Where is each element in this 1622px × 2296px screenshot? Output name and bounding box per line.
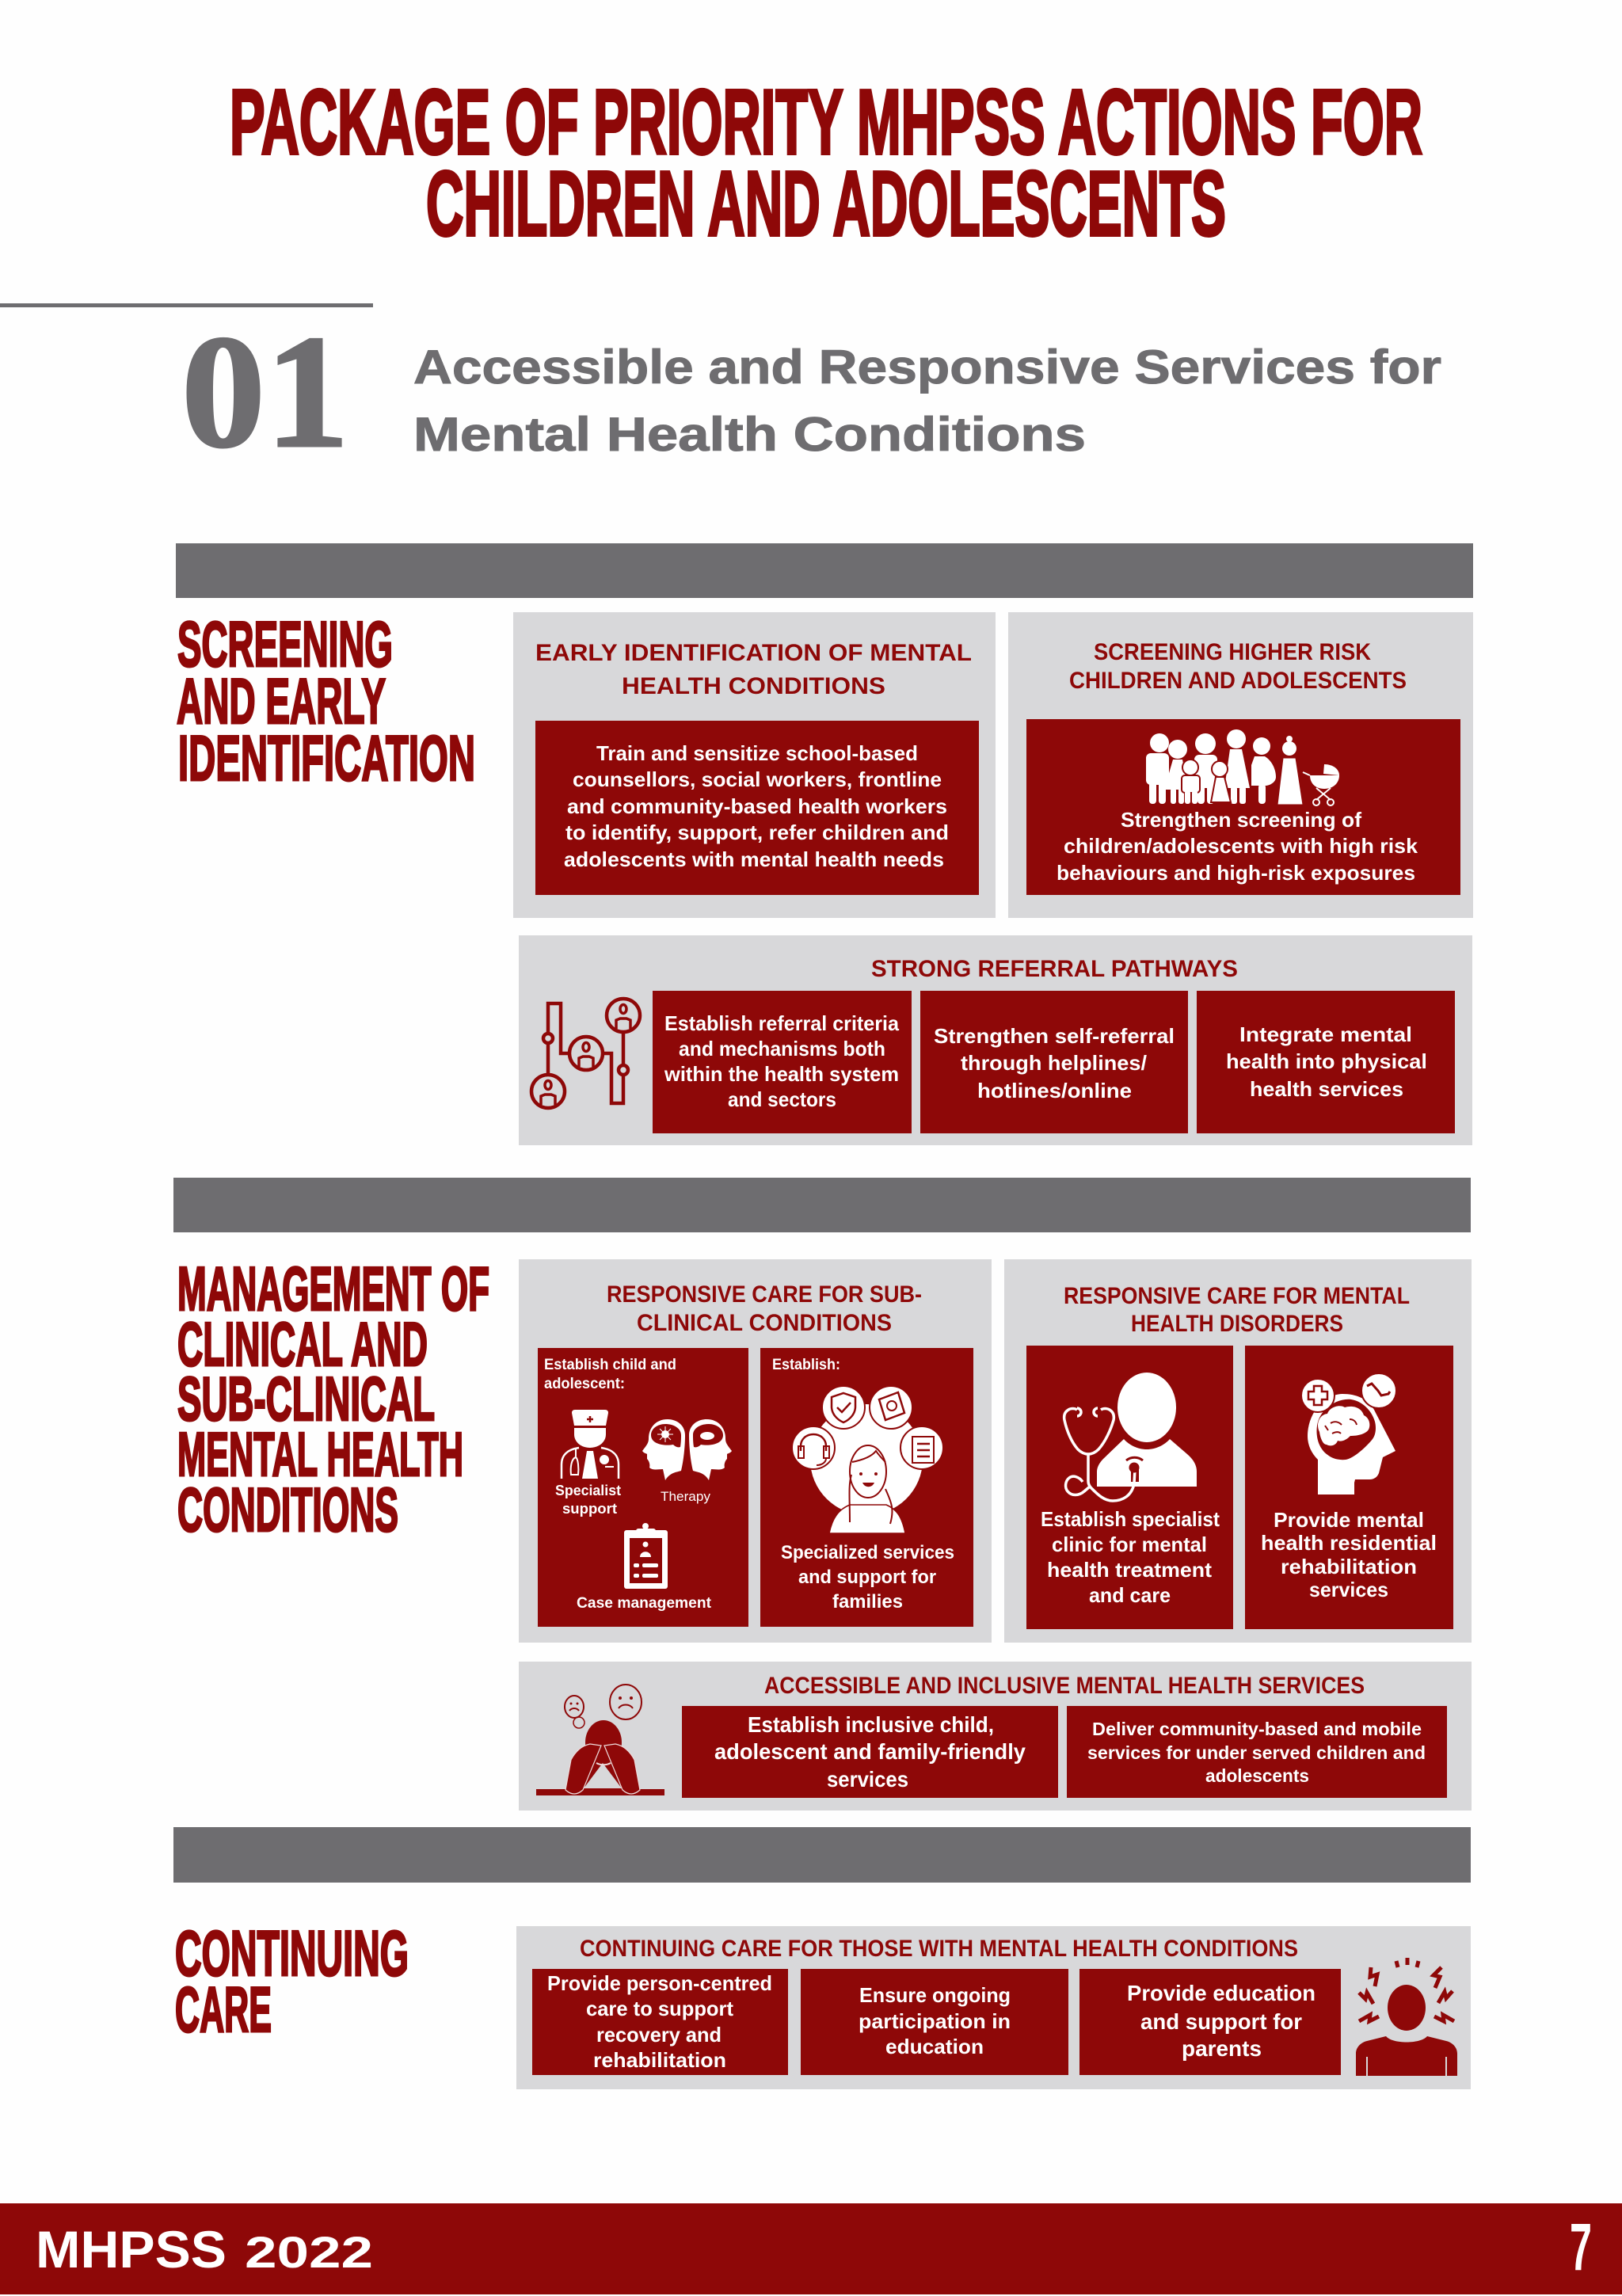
panel heading: sub-clinical [607,1281,922,1336]
heading: screening and early identification: SCREENING [177,609,393,680]
text box: person-centred care: recovery and [596,2023,722,2047]
text box: train and sensitize: counsellors, social workers, frontline [573,767,942,791]
panel heading: early identification: EARLY IDENTIFICATION OF MENTAL [535,640,972,666]
box: specialist clinic: Establish specialist [1041,1507,1220,1531]
text box: support for parents: parents [1182,2036,1262,2061]
text box: community-based services [1067,1706,1447,1798]
heading: management of clinical and sub-clinical: SUB-CLINICAL [177,1364,435,1434]
text box: train and sensitize: adolescents with mental health needs [564,847,944,871]
box: child and adolescent: adolescent: [544,1376,625,1392]
panel heading: screening higher risk [1069,639,1407,694]
text box: referral criteria: and mechanisms both [679,1037,885,1060]
text box: inclusive friendly services: services [827,1767,908,1791]
text box: self-referral: hotlines/online [977,1079,1132,1102]
panel heading: referral: STRONG REFERRAL PATHWAYS [871,956,1238,982]
box: child and adolescent: Establish child and [544,1357,676,1373]
section subtitle [413,341,1441,461]
text box: self-referral: Strengthen self-referral [934,1024,1175,1048]
text box: person-centred care: Provide person-centred [547,1971,772,1995]
text box: strengthen screening: Strengthen screening of [1121,808,1361,832]
title [230,70,1422,255]
panel heading: disorders: HEALTH DISORDERS [1131,1311,1343,1337]
panel heading: sub-clinical: RESPONSIVE CARE FOR SUB- [607,1281,922,1308]
box: specialized services for families: families [832,1591,903,1613]
text box: strengthen screening: children/adolescents with high risk [1064,834,1418,858]
box: residential rehabilitation: Provide mental [1274,1508,1424,1532]
panel heading: early identification [535,640,972,699]
text box: train and sensitize: Train and sensitize school-based [596,741,918,765]
panel heading: sub-clinical: CLINICAL CONDITIONS [637,1310,892,1336]
icon: family group [1146,729,1339,805]
text box: person-centred care: rehabilitation [593,2048,726,2072]
box: specialist clinic: clinic for mental [1052,1533,1207,1556]
icon: head with brain [1301,1373,1396,1494]
panel heading: accessible: ACCESSIBLE AND INCLUSIVE MENTAL HEALTH SERVICES [764,1673,1365,1699]
text box: community-based services: services for under served children and [1087,1742,1426,1763]
panel heading: screening higher risk: SCREENING HIGHER RISK [1094,639,1371,665]
text box: strengthen screening: behaviours and high-risk exposures [1057,861,1415,885]
text box: integrate mental health [1197,991,1455,1133]
section number: 01 [181,303,349,482]
box: specialized services for families: Specialized services [781,1542,954,1563]
text box: community-based services: adolescents [1205,1765,1309,1786]
panel: accessible and inclusive services [519,1662,1472,1811]
box: specialist clinic: and care [1089,1583,1171,1607]
text box: integrate mental health: health services [1250,1077,1403,1101]
box: specialist clinic [1026,1346,1233,1629]
text box: train and sensitize [535,721,979,895]
section subtitle: Accessible and Responsive Services for [413,341,1441,394]
text box: support for parents: Provide education [1127,1981,1315,2005]
heading: screening and early identification: IDENTIFICATION [178,723,475,794]
box: specialized services for families: Establish: [772,1357,840,1373]
footer label: 2022 [245,2227,373,2277]
box: specialized services for families [760,1348,973,1627]
heading: continuing care: CONTINUING [175,1918,409,1989]
text box: support for parents [1079,1969,1341,2075]
text box: self-referral [920,991,1188,1133]
box: child and adolescent: support [562,1501,617,1517]
icon: clipboard [624,1523,668,1589]
heading: screening and early identification [177,609,475,794]
text box: train and sensitize: to identify, support, refer children and [565,821,949,844]
heading: management of clinical and sub-clinical: MANAGEMENT OF [177,1254,489,1323]
text box: inclusive friendly services: Establish inclusive child, [748,1712,994,1737]
icon: stressed person [1356,1958,1457,2076]
panel: strong referral pathways [519,935,1472,1145]
heading: continuing care: CARE [175,1974,272,2046]
box: child and adolescent: Specialist [555,1483,621,1498]
text box: ongoing education: participation in [859,2009,1011,2033]
panel heading: disorders: RESPONSIVE CARE FOR MENTAL [1064,1283,1410,1309]
text box: self-referral: through helplines/ [961,1051,1147,1075]
panel: continuing care [516,1926,1471,2089]
icon: doctor [562,1410,619,1479]
box: specialist clinic: health treatment [1047,1558,1212,1582]
text box: referral criteria: Establish referral criteria [664,1011,900,1035]
text box: ongoing education [801,1969,1068,2075]
text box: person-centred care [532,1969,788,2075]
panel heading: disorders [1064,1283,1410,1337]
heading: management of clinical and sub-clinical [177,1254,489,1544]
panel: early identification [513,612,996,918]
icon: sad person [536,1685,664,1795]
box: residential rehabilitation: services [1309,1578,1388,1601]
icon: referral network [531,999,640,1108]
text box: person-centred care: care to support [586,1997,733,2020]
box: child and adolescent: Case management [577,1595,712,1612]
text box: train and sensitize: and community-based health workers [567,794,947,818]
panel: responsive care sub-clinical [519,1259,992,1643]
section subtitle: Mental Health Conditions [413,408,1086,461]
box: specialized services for families: and support for [798,1567,936,1588]
heading: screening and early identification: AND EARLY [177,666,386,737]
text box: referral criteria: and sectors [728,1087,836,1111]
text box: strengthen screening [1026,719,1460,895]
icon: two heads therapy [642,1419,732,1480]
footer label [36,2220,373,2279]
text box: ongoing education: education [885,2035,984,2058]
icon: patient with stethoscope [1064,1373,1197,1501]
panel heading: screening higher risk: CHILDREN AND ADOLESCENTS [1069,668,1407,694]
text box: community-based services: Deliver community-based and mobile [1092,1719,1422,1739]
box: residential rehabilitation [1245,1346,1453,1629]
heading: continuing care [175,1918,409,2046]
panel: screening higher risk [1008,612,1473,918]
panel heading: early identification: HEALTH CONDITIONS [622,673,885,699]
text box: ongoing education: Ensure ongoing [859,1983,1011,2007]
text box: referral criteria: within the health system [664,1062,899,1086]
heading: management of clinical and sub-clinical: CONDITIONS [177,1475,398,1544]
footer label: MHPSS [36,2220,227,2279]
panel: responsive care mental health disorders [1004,1259,1472,1643]
heading: management of clinical and sub-clinical: MENTAL HEALTH [177,1419,463,1489]
icon: helpline woman [792,1386,943,1533]
text box: referral criteria [653,991,912,1133]
box: residential rehabilitation: rehabilitation [1281,1555,1417,1578]
text box: support for parents: and support for [1140,2009,1302,2034]
text box: inclusive friendly services: adolescent and family-friendly [714,1739,1026,1764]
box: residential rehabilitation: health residential [1261,1531,1437,1555]
text box: inclusive friendly services [682,1706,1058,1798]
box: child and adolescent [538,1348,748,1627]
text box: integrate mental health: Integrate mental [1239,1022,1412,1046]
panel heading: continuing care: CONTINUING CARE FOR THOSE WITH MENTAL HEALTH CONDITIONS [580,1936,1298,1962]
text box: integrate mental health: health into physical [1226,1049,1427,1073]
heading: management of clinical and sub-clinical: CLINICAL AND [177,1309,428,1379]
page number: 7 [1570,2210,1592,2284]
footer bar [0,2203,1622,2294]
box: child and adolescent: Therapy [661,1489,710,1504]
